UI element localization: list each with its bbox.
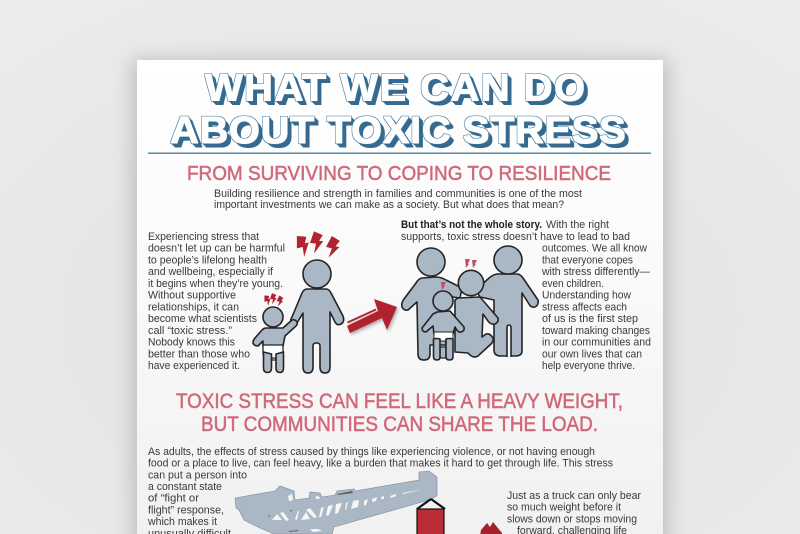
left column text: doesn’t let up can be harmful [148,243,285,255]
icon: kneeling older child [455,270,498,357]
illustration: stressed adult and child [253,231,344,373]
paragraph: adults and stress: which makes it [147,516,217,528]
right column text: our own lives that can [542,348,642,360]
crane dark slots [268,491,353,532]
title rule [148,152,651,154]
icon: adult figure [291,260,344,373]
paragraph: adults and stress: can put a person into [148,469,247,481]
paragraph: adults and stress: flight” response, [148,504,224,516]
left column text: relationships, it can [148,301,239,313]
right column text: supports, toxic stress doesn’t have to lead to bad [401,231,630,243]
icon: large stress bolts [294,231,342,260]
right column text: stress affects each [542,301,627,313]
paragraph: truck comparison: slows down or stops moving [507,513,637,525]
left column text: have experienced it. [148,360,240,372]
paragraph: adults and stress: As adults, the effects of stress caused by things like experiencing violence, or not having enough [148,446,595,458]
left column text: call “toxic stress.” [148,325,232,337]
right column text: help everyone thrive. [542,360,635,372]
sheet shadow [131,58,669,534]
right column text: With the right [546,219,609,231]
illustration: family group [402,246,538,360]
paragraph: adults and stress: food or a place to live, can feel heavy, like a burden that makes it hard to get through life. This stress [148,458,614,470]
left column text: Experiencing stress that [148,231,259,243]
illustration: hanging weight [417,499,445,534]
icon: toddler figure [253,307,297,372]
paragraph: adults and stress: of “fight or [148,493,199,505]
paragraph: truck comparison: Just as a truck can only bear [507,490,641,502]
icon: right adult [476,246,538,357]
icon: small child [422,291,464,360]
icon: small stress bolts [263,293,284,307]
crane lattice openings [272,490,420,532]
left column text [148,231,285,372]
right column text: with stress differently— [541,266,650,278]
section heading: TOXIC STRESS CAN FEEL LIKE A HEAVY WEIGHT, [176,390,623,413]
left column text: Without supportive [148,290,236,302]
left column text: Nobody knows this [148,336,236,348]
left column text: become what scientists [148,313,258,325]
icon: flames [480,522,502,534]
section heading: BUT COMMUNITIES CAN SHARE THE LOAD. [201,413,598,436]
paragraph: adults and stress [147,446,614,534]
arrow [347,299,397,333]
right column text: Understanding how [542,290,631,302]
left column text: it begins when they’re young. [148,278,283,290]
right column text [401,219,651,372]
intro text [214,188,582,211]
section heading [176,390,623,436]
right column text: outcomes. We all know [542,243,647,255]
right column text: But that’s not the whole story. [401,219,542,231]
left column text: better than those who [148,348,250,360]
paragraph: truck comparison: so much weight before it [507,502,621,514]
intro text: important investments we can make as a society. But what does that mean? [214,199,564,211]
right column text: of us is the first step [542,313,638,325]
intro text: Building resilience and strength in families and communities is one of the most [214,188,582,200]
right column text: even children. [542,278,604,290]
title [170,67,626,152]
icon: left adult [402,248,462,360]
title: WHAT WE CAN DO [205,67,585,109]
paragraph: truck comparison [507,490,641,534]
paper sheet [137,60,663,534]
right column text: toward making changes [542,325,651,337]
paragraph: adults and stress: a constant state [148,481,222,493]
left column text: to people’s lifelong health [148,254,267,266]
illustration: crane [235,471,437,534]
title: ABOUT TOXIC STRESS [170,110,626,152]
icon: small pink stress marks [441,259,477,290]
left column text: and wellbeing, especially if [148,266,274,278]
subtitle: FROM SURVIVING TO COPING TO RESILIENCE [187,162,611,185]
right column text: in our communities and [542,336,651,348]
right column text: that everyone copes [542,254,634,266]
